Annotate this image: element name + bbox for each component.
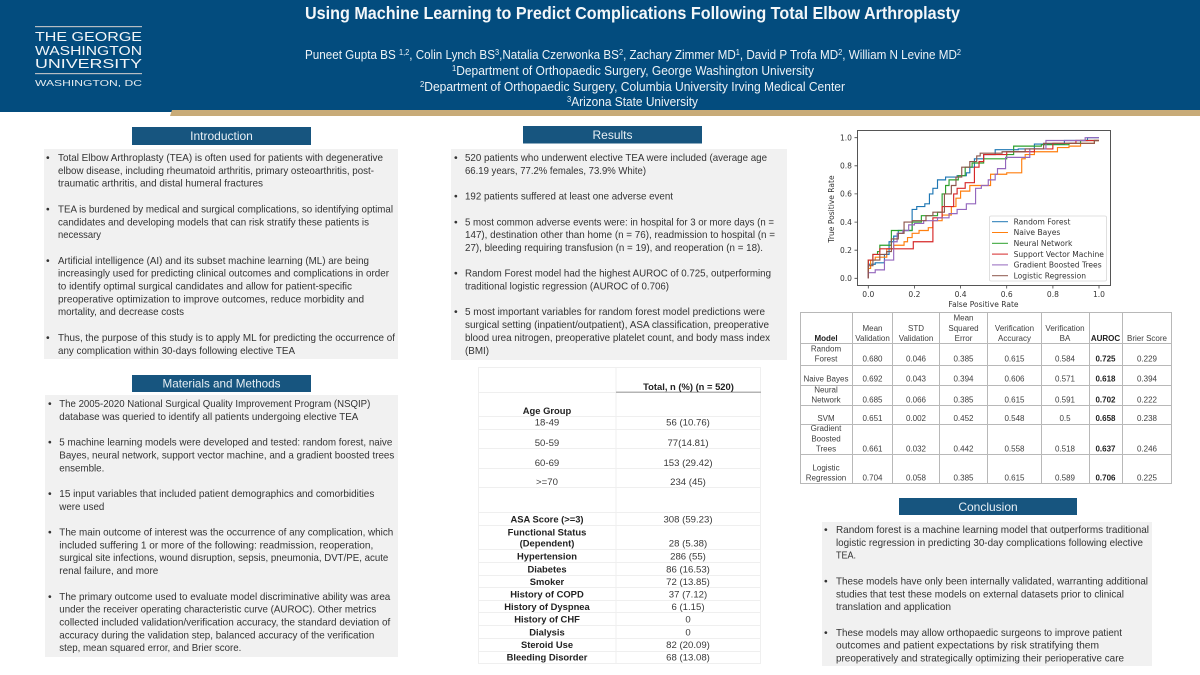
table: patient demographics: History of Dyspnea [504, 601, 591, 612]
table: model performance: Error [955, 334, 973, 343]
table: model performance: 0.222 [1137, 396, 1158, 404]
table: patient demographics: 0 [685, 628, 691, 638]
text block: introduction bullets: Thus, the purpose of this study is to apply ML for predicting the occurrence of [58, 333, 395, 344]
authors and affiliations: 2 [838, 48, 843, 57]
authors and affiliations: 2 [420, 80, 425, 89]
table: model performance: 0.548 [1004, 414, 1025, 423]
y axis tick labels [840, 133, 852, 283]
x axis tick labels: 0.8 [1047, 290, 1059, 299]
authors and affiliations: Department of Orthopaedic Surgery, George Washington University [456, 64, 815, 78]
text block: results bullets: 5 most important variables for random forest model predictions were [465, 307, 765, 318]
text block: results bullets: • [454, 217, 458, 228]
table: model performance: 0.584 [1055, 355, 1076, 364]
table: patient demographics: 50-59 [535, 438, 559, 449]
table: model performance: 0.043 [906, 375, 927, 384]
authors and affiliations: 2 [957, 48, 962, 57]
text block: methods bullets: collected included validation/verification accuracy, the standard deviation of [59, 618, 390, 628]
text block: conclusion bullets: These models have only been internally validated, warranting additional [836, 576, 1148, 587]
authors and affiliations: 3 [567, 95, 572, 104]
table: patient demographics: 72 (13.85) [666, 577, 710, 588]
table: model performance: Brier Score [1127, 334, 1168, 343]
table: model performance: 0.246 [1137, 445, 1158, 454]
table: patient demographics: Steroid Use [521, 639, 573, 650]
table: patient demographics: 56 (10.76) [666, 418, 710, 429]
text block: results bullets: traditional logistic regression (AUROC of 0.706) [465, 282, 669, 292]
table: model performance: 0.618 [1095, 375, 1116, 384]
text block: introduction bullets: • [46, 256, 50, 267]
table: model performance: 0.661 [862, 445, 883, 454]
text block: introduction bullets: TEA is burdened by medical and surgical complications, so identifying optimal [58, 204, 393, 215]
text block: methods bullets: were used [58, 502, 104, 513]
text block: results bullets: 192 patients suffered at least one adverse event [465, 192, 673, 203]
text block: methods bullets: The 2005-2020 National Surgical Quality Improvement Program (NSQIP) [59, 399, 370, 410]
table: model performance: Validation [899, 334, 933, 343]
table: model performance: 0.046 [906, 355, 927, 364]
table: model performance: 0.238 [1137, 414, 1158, 423]
table: patient demographics: 286 (55) [670, 551, 706, 562]
legend: Neural Network [1014, 239, 1073, 248]
logo: The George Washington University: THE GEORGE [35, 30, 142, 44]
table: model performance: 0.394 [953, 375, 974, 384]
table: model performance: Network [811, 396, 842, 404]
legend: Gradient Boosted Trees [1014, 261, 1102, 270]
text block: conclusion bullets: Random forest is a machine learning model that outperforms traditional [836, 525, 1149, 536]
table: patient demographics: Functional Status [508, 527, 586, 538]
table: model performance: AUROC [1091, 334, 1120, 343]
table: model performance: 0.394 [1137, 375, 1158, 384]
text block: methods bullets: database was queried to identify all patients undergoing elective TEA [59, 412, 358, 423]
text block: results bullets: • [454, 269, 458, 280]
legend: Random Forest [1014, 217, 1070, 226]
text block: conclusion bullets: preoperatively and strategically optimizing their perioperative care [836, 654, 1124, 664]
logo: The George Washington University: UNIVERSITY [35, 57, 143, 71]
text block: conclusion bullets: studies that test these models on external datasets prior to clinical [836, 589, 1124, 600]
table: model performance: Squared [948, 324, 979, 333]
x axis tick labels: 0.4 [955, 290, 967, 299]
text block: methods bullets: 15 input variables that included patient demographics and comorbidities [59, 489, 374, 500]
table: model performance: 0.229 [1137, 355, 1158, 364]
text block: results bullets: • [454, 307, 458, 318]
table: model performance: 0.385 [953, 474, 974, 483]
text block: introduction bullets: mortality, and decrease costs [58, 307, 184, 318]
table: model performance: 0.615 [1004, 474, 1025, 483]
header banner [0, 0, 1200, 116]
table: patient demographics: 60-69 [535, 458, 559, 469]
table: model performance: 0.589 [1055, 474, 1076, 483]
table: patient demographics: 234 (45) [670, 477, 706, 488]
table: model performance: 0.725 [1095, 355, 1116, 364]
authors and affiliations: , Colin Lynch BS [409, 48, 495, 62]
text block: introduction bullets: Total Elbow Arthroplasty (TEA) is often used for patients with degenerative [58, 153, 383, 164]
text block: methods bullets: Bayes, neural network, support vector machine, and a gradient boosted trees [59, 450, 394, 461]
authors and affiliations [305, 48, 962, 109]
table: model performance: 0.032 [906, 445, 927, 454]
table: model performance: 0.385 [953, 396, 974, 404]
table: patient demographics: Smoker [530, 576, 565, 587]
text block: results bullets [454, 153, 775, 357]
text block: introduction bullets: preoperative optimization to improve outcomes, reduce morbidity and [58, 294, 364, 305]
logo: The George Washington University: WASHINGTON, DC [35, 78, 142, 88]
table: model performance: 0.571 [1055, 375, 1076, 384]
table: model performance: 0.706 [1095, 474, 1116, 483]
authors and affiliations: Puneet Gupta BS [305, 48, 403, 62]
text block: results bullets: • [454, 153, 458, 164]
heading: conclusion [899, 498, 1077, 515]
table: model performance: Verification [995, 324, 1034, 333]
legend: Naive Bayes [1014, 228, 1060, 237]
text block: methods bullets [48, 399, 394, 654]
text block: methods bullets: 5 machine learning models were developed and tested: random forest, naive [59, 438, 393, 449]
table: model performance: 0.591 [1055, 396, 1076, 404]
table: model performance: BA [1060, 334, 1071, 343]
table: patient demographics: (Dependent) [520, 538, 574, 549]
table: patient demographics: Total, n (%) (n = 520) [643, 381, 734, 392]
table: model performance: 0.558 [1004, 445, 1025, 454]
text block: methods bullets: • [48, 399, 52, 410]
table: patient demographics: 18-49 [535, 418, 559, 429]
heading: materials and methods: Materials and Methods [162, 376, 280, 390]
authors and affiliations: 3 [495, 48, 500, 57]
table: model performance: 0.225 [1137, 474, 1158, 483]
text block: results bullets: 147), destination other than home (n = 76), readmission to hospital (n = [465, 230, 775, 241]
text block: methods bullets: surgical site infections, wound disruption, sepsis, pneumonia, DVT/PE, acute [59, 553, 389, 564]
text block: methods bullets: • [48, 489, 52, 500]
text block: conclusion bullets: These models may allow orthopaedic surgeons to improve patient [836, 628, 1122, 639]
table: model performance: Neural [814, 386, 838, 394]
table: patient demographics: Diabetes [527, 563, 567, 574]
y axis tick labels: 0.8 [840, 162, 852, 170]
x axis tick labels: 0.0 [862, 290, 874, 299]
table: patient demographics: Hypertension [517, 550, 577, 561]
y axis tick labels: 0.0 [840, 274, 852, 283]
table: patient demographics: Bleeding Disorder [507, 652, 588, 663]
table: model performance: 0.606 [1004, 375, 1025, 384]
table: patient demographics: 6 (1.15) [671, 602, 705, 613]
text block: results bullets: surgical setting (inpatient/outpatient), ASA classification, preoperative [465, 320, 769, 331]
table: model performance: 0.058 [906, 474, 927, 483]
table: model performance: 0.680 [862, 355, 883, 364]
y axis tick labels: 1.0 [840, 133, 852, 142]
text block: methods bullets: accuracy during the validation step, balanced accuracy of the verification [59, 630, 374, 641]
table: patient demographics: 37 (7.12) [669, 590, 707, 600]
heading: introduction [132, 127, 311, 145]
table: model performance: Validation [855, 334, 890, 343]
table: model performance: 0.002 [906, 414, 927, 423]
authors and affiliations: Department of Orthopaedic Surgery, Columbia University Irving Medical Center [424, 80, 845, 94]
text block: introduction bullets: any complication within 30-days following elective TEA [58, 346, 295, 357]
table: model performance: 0.658 [1095, 414, 1116, 423]
text block: conclusion bullets [824, 525, 1149, 664]
table: model performance: SVM [817, 414, 835, 423]
text block: methods bullets: included suffering 1 or more of the following: readmission, reoperation, [59, 540, 373, 551]
text block: methods bullets: The main outcome of interest was the occurrence of any complication, which [59, 528, 393, 538]
text block: results bullets: 66.19 years, 77.2% females, 73.9% White) [465, 166, 646, 177]
authors and affiliations: , David P Trofa MD [740, 48, 838, 62]
panel: introduction [44, 127, 398, 359]
table: patient demographics: 68 (13.08) [666, 653, 710, 664]
table: patient demographics: >=70 [536, 477, 558, 488]
text block: methods bullets: renal failure, and more [59, 566, 159, 577]
table: model performance: Trees [816, 445, 836, 454]
legend [990, 216, 1106, 281]
table: model performance: Logistic [812, 464, 840, 472]
text block: results bullets: 5 most common adverse events were: in hospital for 3 or more days (n = [465, 217, 774, 228]
table: model performance: 0.066 [906, 396, 927, 404]
table: patient demographics: History of CHF [514, 614, 580, 624]
logo: The George Washington University [35, 26, 143, 88]
table: patient demographics: Age Group [523, 405, 571, 416]
table: model performance: 0.615 [1004, 355, 1025, 364]
x axis tick labels [862, 290, 1105, 299]
y axis label: True Positive Rate [827, 175, 836, 244]
table: patient demographics: 82 (20.09) [666, 640, 710, 651]
table: model performance: STD [908, 324, 924, 333]
x axis tick labels: 0.6 [1001, 290, 1013, 299]
x axis tick labels: 0.2 [908, 290, 921, 299]
text block: conclusion bullets: TEA. [836, 551, 856, 562]
text block: results bullets: Random Forest model had the highest AUROC of 0.725, outperforming [465, 269, 771, 280]
text block: conclusion bullets: logistic regression in predicting 30-day complications following elective [836, 538, 1143, 549]
heading: materials and methods [132, 375, 311, 392]
authors and affiliations: 1 [736, 48, 740, 57]
authors and affiliations: 2 [619, 48, 624, 57]
chart: ROC curves [827, 130, 1110, 309]
table: model performance: Verification [1045, 324, 1085, 333]
table: model performance: Mean [953, 314, 974, 322]
text block: introduction bullets: • [46, 333, 50, 344]
text block: methods bullets: ensemble. [59, 463, 104, 474]
heading: introduction: Introduction [190, 129, 253, 143]
table: model performance: 0.637 [1095, 445, 1116, 454]
table: patient demographics [478, 368, 761, 664]
table: model performance [800, 312, 1172, 484]
text block: introduction bullets: traumatic arthritis, and distal humeral fractures [58, 179, 263, 190]
text block: introduction bullets: candidates and developing models that can risk stratify these patients is [58, 217, 369, 228]
ROC curve lines [868, 138, 1099, 278]
table: model performance: 0.518 [1055, 445, 1076, 454]
table: patient demographics: Dialysis [529, 626, 565, 638]
text block: conclusion bullets: • [824, 628, 828, 639]
text block: methods bullets: • [48, 592, 52, 603]
text block: conclusion bullets: translation and application [836, 602, 951, 613]
heading: results [523, 126, 702, 144]
text block: results bullets: blood urea nitrogen, preoperative platelet count, and body mass index [465, 333, 771, 344]
panel: materials and methods [45, 375, 398, 657]
text block: results bullets: (BMI) [465, 346, 489, 357]
title: Using Machine Learning to Predict Complications Following Total Elbow Arthroplasty [305, 3, 960, 23]
table: patient demographics: 0 [685, 614, 691, 626]
table: model performance: Forest [815, 355, 838, 364]
table: model performance: Model [814, 334, 838, 343]
table: model performance: Gradient [811, 424, 842, 433]
table: patient demographics: History of COPD [510, 588, 584, 600]
table: model performance: Boosted [811, 434, 841, 444]
table: model performance: Regression [806, 474, 846, 483]
authors and affiliations: Arizona State University [571, 95, 699, 109]
text block: methods bullets: • [48, 528, 52, 538]
logo: The George Washington University: WASHINGTON [35, 44, 142, 58]
table: model performance: 0.615 [1004, 396, 1025, 404]
panel: conclusion [822, 498, 1152, 666]
table: patient demographics: 86 (16.53) [666, 564, 710, 575]
table: model performance: 0.704 [862, 474, 883, 483]
authors and affiliations: , Zachary Zimmer MD [623, 48, 736, 62]
text block: results bullets: 520 patients who underwent elective TEA were included (average age [465, 153, 767, 164]
table: patient demographics: ASA Score (>=3) [510, 514, 584, 525]
table: model performance: 0.442 [953, 445, 974, 454]
table: model performance: 0.702 [1095, 396, 1116, 404]
authors and affiliations: 1 [452, 64, 457, 73]
text block: methods bullets: • [48, 438, 52, 449]
table: model performance: 0.651 [862, 414, 883, 423]
text block: introduction bullets: Artificial intelligence (AI) and its subset machine learning (ML) are being [58, 256, 369, 267]
text block: introduction bullets: • [46, 204, 50, 215]
y axis tick labels: 0.6 [840, 190, 852, 199]
text block: introduction bullets: necessary [58, 230, 102, 241]
text block: introduction bullets: elbow disease, including rheumatoid arthritis, primary osteoarthritis, post- [58, 166, 374, 177]
legend: Logistic Regression [1014, 271, 1086, 280]
text block: methods bullets: The primary outcome used to evaluate model discriminative ability was area [59, 592, 391, 603]
text block: introduction bullets [46, 153, 395, 357]
panel: results [451, 126, 787, 360]
y axis tick labels: 0.4 [840, 218, 852, 227]
text block: introduction bullets: • [46, 153, 50, 164]
text block: results bullets: • [454, 192, 458, 203]
table: model performance: Accuracy [998, 334, 1031, 343]
table: patient demographics: 77(14.81) [667, 438, 709, 449]
text block: introduction bullets: to identify optimal surgical candidates and allow for patient-specific [58, 282, 352, 292]
table: model performance: Naive Bayes [804, 375, 848, 384]
table: model performance: 0.692 [862, 375, 883, 384]
heading: results: Results [592, 128, 633, 142]
y axis tick labels: 0.2 [840, 246, 852, 255]
text block: conclusion bullets: outcomes and patient expectations by risk stratifying them [836, 641, 1099, 652]
text block: results bullets: 27), bleeding requiring transfusion (n = 19), and reoperation (n = 18). [465, 243, 763, 254]
authors and affiliations: ,Natalia Czerwonka BS [499, 48, 619, 62]
table: model performance: 0.685 [862, 396, 883, 404]
authors and affiliations: 1,2 [399, 48, 410, 57]
table: patient demographics: 28 (5.38) [669, 539, 707, 550]
heading: conclusion: Conclusion [958, 500, 1018, 514]
table: model performance: 0.452 [953, 414, 974, 423]
table: patient demographics: 308 (59.23) [663, 515, 713, 526]
text block: introduction bullets: increasingly used for predicting clinical outcomes and complications in order [58, 269, 390, 280]
text block: conclusion bullets: • [824, 576, 828, 587]
legend: Support Vector Machine [1014, 250, 1104, 259]
table: model performance: 0.385 [953, 355, 974, 364]
table: model performance: Mean [862, 324, 883, 333]
table: patient demographics: 153 (29.42) [663, 458, 713, 469]
x axis tick labels: 1.0 [1093, 290, 1105, 299]
text block: methods bullets: under the receiver operating characteristic curve (AUROC). Other metrics [59, 605, 376, 616]
table: model performance: Random [811, 345, 841, 354]
authors and affiliations: , William N Levine MD [842, 48, 957, 62]
x axis label: False Positive Rate [948, 300, 1019, 309]
text block: conclusion bullets: • [824, 525, 828, 536]
text block: methods bullets: step, mean squared error, and Brier score. [59, 643, 241, 654]
table: model performance: 0.5 [1059, 414, 1071, 423]
